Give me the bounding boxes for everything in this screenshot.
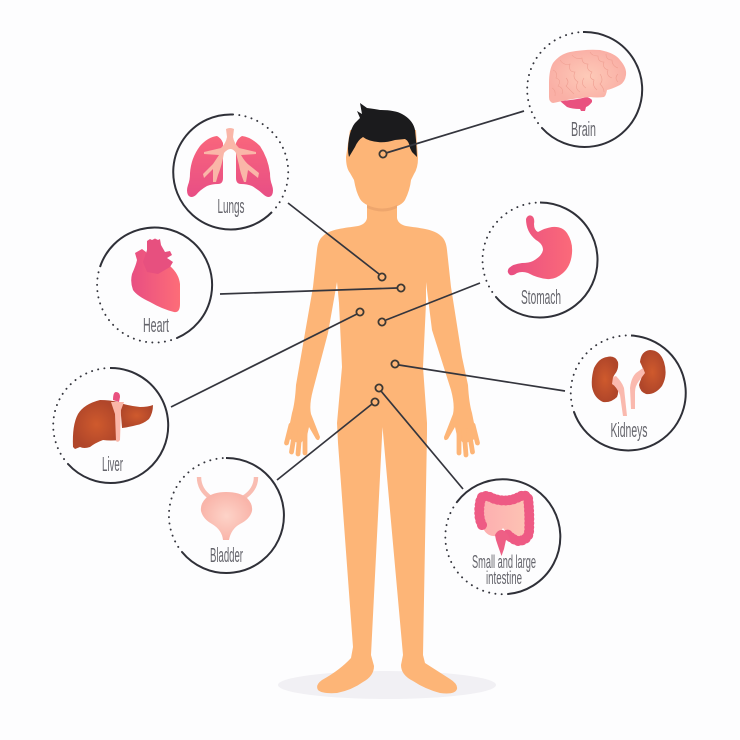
- panel: lungs: Lungs: [218, 196, 244, 218]
- head: [346, 130, 418, 209]
- icon: heart: [131, 238, 180, 312]
- connector: lungs: [288, 203, 386, 281]
- panel: liver: [53, 368, 168, 483]
- human body figure: [286, 103, 478, 694]
- connector: kidneys: [391, 360, 565, 391]
- panel: intestine: [445, 479, 560, 594]
- hair: [348, 103, 417, 157]
- panel: stomach: [483, 202, 598, 318]
- connector: bladder: [277, 398, 379, 480]
- ground shadow: [278, 671, 496, 699]
- neck shadow: [367, 205, 397, 212]
- panel: kidneys: [571, 335, 686, 450]
- right hand fingers: [459, 425, 478, 455]
- panel: bladder: [169, 458, 284, 573]
- panel: lungs: [173, 114, 288, 229]
- panel: heart: [97, 228, 212, 343]
- connector: stomach: [378, 283, 480, 326]
- connector: heart: [220, 284, 405, 294]
- label: intestine line 2: intestine: [486, 568, 522, 588]
- panel: bladder: Bladder: [210, 545, 243, 567]
- label: intestine: Small and large: [472, 552, 536, 572]
- icon: stomach: [508, 215, 572, 279]
- icon: liver: [73, 392, 153, 449]
- label: brain: Brain: [571, 119, 596, 141]
- icon: kidneys: [592, 350, 666, 416]
- label: kidneys: Kidneys: [610, 420, 648, 442]
- bronchi: [203, 128, 259, 182]
- connector: liver: [171, 308, 364, 407]
- icon: intestine: [479, 496, 529, 556]
- icon: lungs: [187, 128, 273, 197]
- label: heart: Heart: [143, 315, 169, 337]
- panel: brain: [527, 32, 642, 147]
- body silhouette: [287, 204, 477, 694]
- panel: liver: Liver: [102, 454, 123, 476]
- icon: bladder: [199, 477, 256, 540]
- connector: brain: [379, 111, 524, 158]
- left hand fingers: [286, 425, 305, 454]
- icon: brain: [549, 50, 626, 111]
- label: stomach: Stomach: [521, 287, 561, 309]
- connector: intestine: [375, 384, 463, 489]
